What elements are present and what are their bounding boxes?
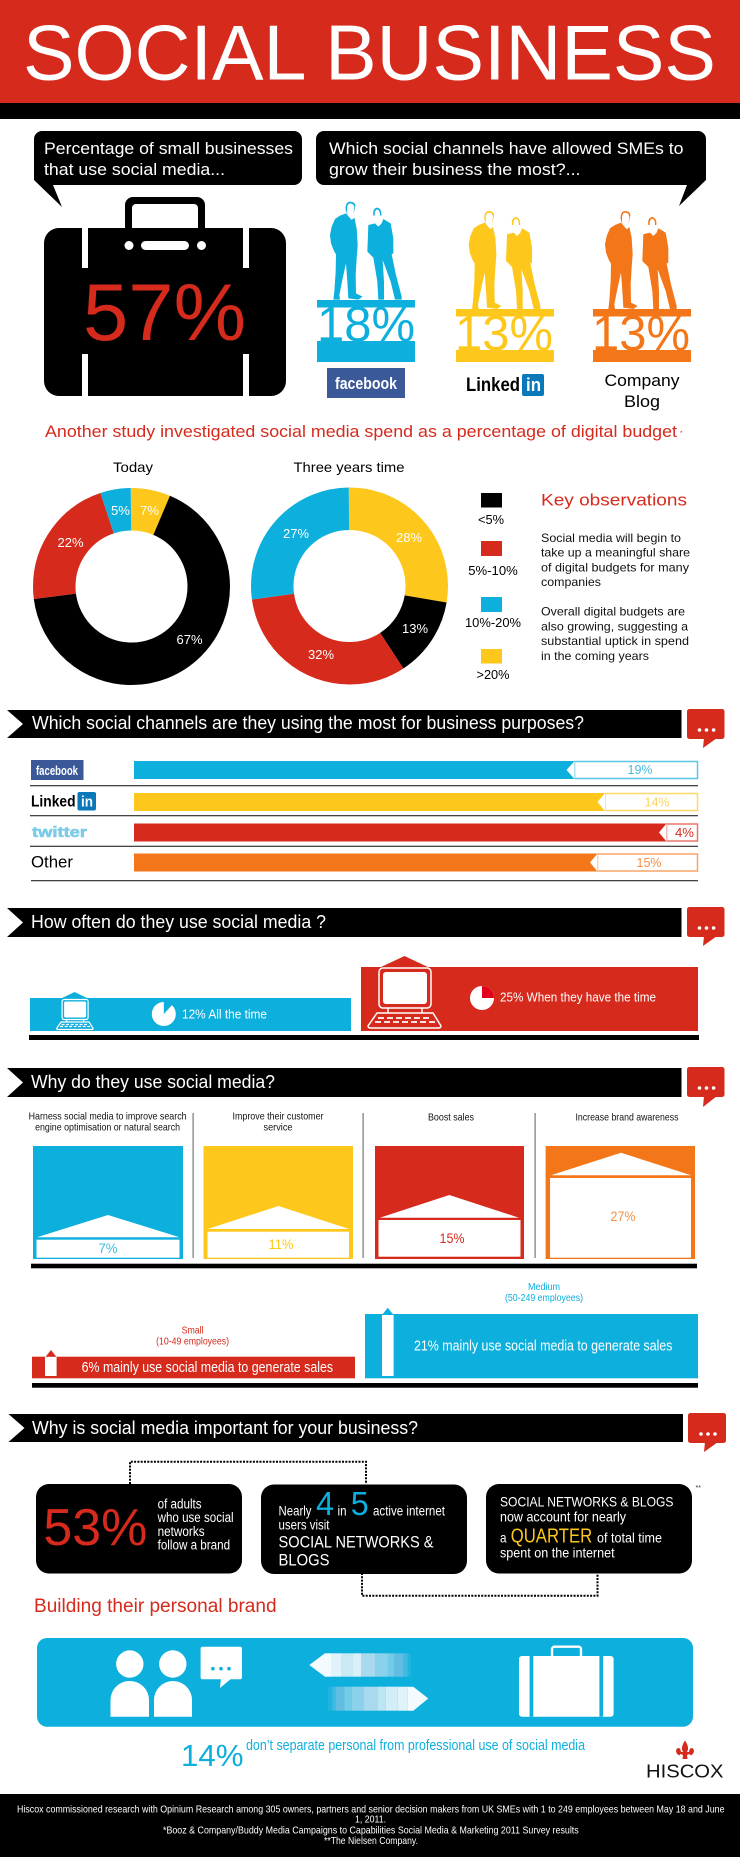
icon: large computer (368, 968, 441, 1028)
icon: speech bubble (201, 1647, 242, 1688)
panel: 25% when they have the time: 25% When they have the time (500, 990, 656, 1005)
row: linkedin (31, 792, 698, 811)
panel: 12% all the time: 12% All the time (182, 1007, 267, 1022)
icon: pie 25% (470, 986, 494, 1010)
row: linkedin: 14% (644, 795, 670, 810)
panel: 7% search: 7% (98, 1240, 118, 1256)
panel: 53% of adults (36, 1484, 242, 1574)
bar: small 6%: 6% mainly use social media to generate sales (82, 1359, 333, 1376)
icon: speech bubble (687, 1067, 724, 1107)
key observations: Key observations (541, 490, 687, 510)
dotted connector top (130, 1462, 366, 1484)
panel: nearly 4 in 5 (261, 1484, 467, 1574)
stat: 14% (181, 1737, 586, 1773)
logo: linkedin: in (526, 375, 541, 395)
panel: 27% brand awareness: 27% (610, 1208, 636, 1224)
icon: two people orange (605, 211, 677, 309)
panel: 7% search (33, 1146, 183, 1259)
icon: speech bubble (688, 1413, 726, 1452)
key observations: Social media will begin to (541, 531, 681, 545)
speech bubble: percentage of small businesses: that use social media... (44, 160, 225, 179)
row: other (31, 853, 698, 872)
panel: a quarter of total time (486, 1484, 692, 1574)
panel: a quarter of total time: a (500, 1530, 507, 1546)
logo: facebook: facebook (335, 374, 397, 393)
key observations: of digital budgets for many (541, 560, 689, 574)
panel: 11% customer service: 11% (268, 1236, 294, 1252)
legend (465, 493, 521, 682)
stat: facebook 18% (317, 202, 415, 398)
legend: 10%-20% (465, 615, 521, 630)
reasons captions: Harness social media to improve search (29, 1111, 187, 1123)
heading: another study: Another study investigated social media spend as a percentage of digital budget (45, 422, 677, 441)
logo: hiscox: HISCOX (646, 1762, 724, 1782)
row: other: Other (31, 853, 73, 872)
logo: hiscox (646, 1740, 724, 1782)
panel: nearly 4 in 5: 5 (351, 1485, 369, 1522)
donut chart: today: Today (113, 459, 153, 475)
speech bubble: which social channels (316, 131, 706, 206)
row: facebook: 19% (628, 762, 653, 777)
panel: nearly 4 in 5: Nearly (278, 1504, 312, 1519)
title banner (0, 0, 740, 119)
donut chart: today: 5% (111, 503, 130, 518)
panel: nearly 4 in 5: BLOGS (278, 1550, 330, 1569)
reasons captions: engine optimisation or natural search (35, 1121, 180, 1133)
panel: nearly 4 in 5: SOCIAL NETWORKS & (278, 1532, 434, 1551)
stat: 14%: 14% (181, 1738, 244, 1773)
row: facebook (31, 760, 698, 780)
panel: nearly 4 in 5: in (338, 1504, 346, 1519)
panel: a quarter of total time: spent on the internet (500, 1544, 615, 1560)
logo: facebook (327, 368, 405, 398)
dotted connector bottom (362, 1573, 598, 1596)
panel: a quarter of total time: of total time (597, 1530, 662, 1546)
label: company blog: Blog (624, 392, 660, 411)
icon: briefcase (519, 1647, 614, 1717)
key observations (541, 490, 690, 663)
panel: personal and professional (37, 1638, 693, 1727)
label: small employees: Small (182, 1325, 204, 1337)
panel: 11% customer service (204, 1146, 353, 1259)
key observations: Overall digital budgets are (541, 605, 685, 619)
donut chart: today: 7% (140, 503, 159, 518)
label: medium employees: (50-249 employees) (505, 1292, 583, 1304)
footnote mark: ** (696, 1485, 701, 1492)
panel: nearly 4 in 5: active internet (373, 1504, 445, 1519)
panel: 53% of adults: networks (158, 1524, 205, 1539)
logo: linkedin: Linked (466, 375, 520, 396)
heading: building their personal brand: Building their personal brand (34, 1596, 277, 1617)
section heading: which social channels (7, 709, 724, 748)
stat: linkedin 13% (455, 211, 554, 396)
title: SOCIAL BUSINESS (23, 8, 716, 96)
icon: two people yellow (469, 211, 540, 309)
key observations: companies (541, 575, 601, 589)
label: medium employees: Medium (528, 1281, 560, 1293)
section heading: why important: Why is social media important for your business? (32, 1418, 418, 1438)
footer: 1, 2011. (355, 1814, 386, 1826)
panel: 25% when they have the time (361, 956, 698, 1031)
icon: two people blue (330, 202, 402, 300)
row: linkedin: in (81, 794, 93, 810)
key observations: substantial uptick in spend (541, 634, 689, 648)
donut chart: today (54, 459, 209, 664)
panel: 53% of adults: of adults (158, 1496, 202, 1512)
stat: 14%: don’t separate personal from professional use of social media (246, 1737, 586, 1754)
section heading: which social channels: Which social channels are they using the most for business purposes? (32, 713, 584, 733)
legend: <5% (478, 512, 504, 527)
panel: 15% boost sales (375, 1146, 524, 1259)
bar chart: channels used (30, 760, 698, 881)
footer: **The Nielsen Company. (324, 1835, 418, 1847)
label: company blog (604, 371, 680, 411)
label: small employees (156, 1325, 229, 1348)
donut chart: three years time (272, 459, 428, 663)
icon: pie 12% (152, 1001, 176, 1026)
panel: a quarter of total time: now account for nearly (500, 1509, 626, 1525)
panel: 12% all the time (30, 992, 351, 1031)
reasons captions (29, 1111, 679, 1133)
label: medium employees (505, 1281, 583, 1304)
reasons captions: service (264, 1121, 293, 1133)
panel: 53% of adults: 53% (43, 1499, 147, 1557)
section heading: why important (8, 1413, 726, 1452)
donut chart: today: 67% (176, 632, 203, 647)
row: twitter (32, 824, 698, 842)
footer (0, 1794, 740, 1857)
panel: 27% brand awareness (546, 1146, 695, 1259)
row: other: 15% (636, 855, 662, 870)
section heading: why do they use (7, 1067, 724, 1107)
stat: linkedin 13%: 13% (455, 307, 553, 361)
icon: arrow right (328, 1687, 428, 1711)
reasons captions: Improve their customer (232, 1111, 324, 1123)
speech bubble: percentage of small businesses (34, 131, 302, 207)
stat: facebook 18%: 18% (317, 298, 415, 352)
donut chart: three years time: 27% (283, 526, 309, 541)
icon: small computer (57, 1000, 93, 1030)
stat: company blog 13%: 13% (592, 307, 690, 361)
bar: medium 21%: 21% mainly use social media to generate sales (414, 1338, 672, 1355)
reasons captions: Boost sales (428, 1112, 474, 1124)
donut chart: three years time: 28% (396, 530, 422, 545)
key observations: take up a meaningful share (541, 546, 690, 560)
icon: speech bubble (687, 709, 724, 748)
panel: 15% boost sales: 15% (440, 1230, 464, 1246)
panel: a quarter of total time: QUARTER (511, 1526, 592, 1548)
panel: nearly 4 in 5: users visit (278, 1517, 330, 1532)
label: small employees: (10-49 employees) (156, 1336, 229, 1348)
section heading: how often (7, 907, 724, 946)
icon: speech bubble (687, 907, 724, 946)
panel: 53% of adults: follow a brand (158, 1538, 230, 1552)
panel: 53% of adults: who use social (157, 1510, 234, 1525)
donut chart: today: 22% (58, 535, 84, 550)
icon: two people (110, 1650, 192, 1717)
section heading: how often: How often do they use social media ? (31, 912, 326, 932)
row: twitter: 4% (675, 825, 694, 840)
label: company blog: Company (604, 371, 680, 390)
bar: medium 21% (365, 1308, 698, 1378)
bar: small 6% (32, 1350, 355, 1378)
donut chart: three years time: 13% (402, 621, 428, 636)
footer: *Booz & Company/Buddy Media Campaigns to Capabilities Social Media & Marketing 2011 Survey results (163, 1824, 579, 1836)
row: linkedin: Linked (31, 794, 76, 811)
heading: another study: * (680, 431, 683, 437)
legend: 5%-10% (468, 563, 518, 578)
icon: briefcase with 57%: 57% (83, 268, 246, 358)
donut chart: three years time: 32% (308, 647, 334, 662)
key observations: in the coming years (541, 649, 649, 663)
speech bubble: which social channels: Which social channels have allowed SMEs to (329, 139, 684, 158)
row: twitter: twitter (32, 824, 87, 841)
speech bubble: percentage of small businesses: Percentage of small businesses (44, 139, 293, 158)
panel: a quarter of total time: SOCIAL NETWORKS & BLOGS (500, 1494, 674, 1510)
donut chart: three years time: Three years time (294, 459, 405, 475)
reasons captions: Increase brand awareness (576, 1112, 678, 1124)
speech bubble: which social channels: grow their business the most?... (329, 160, 580, 179)
legend: >20% (476, 667, 510, 682)
icon: arrow left (309, 1653, 411, 1677)
section heading: why do they use: Why do they use social media? (31, 1072, 275, 1092)
icon: briefcase with 57% (44, 197, 286, 396)
stat: company blog 13% (592, 211, 691, 411)
panel: nearly 4 in 5: 4 (316, 1485, 334, 1522)
row: facebook: facebook (36, 763, 79, 778)
key observations: also growing, suggesting a (541, 619, 688, 633)
